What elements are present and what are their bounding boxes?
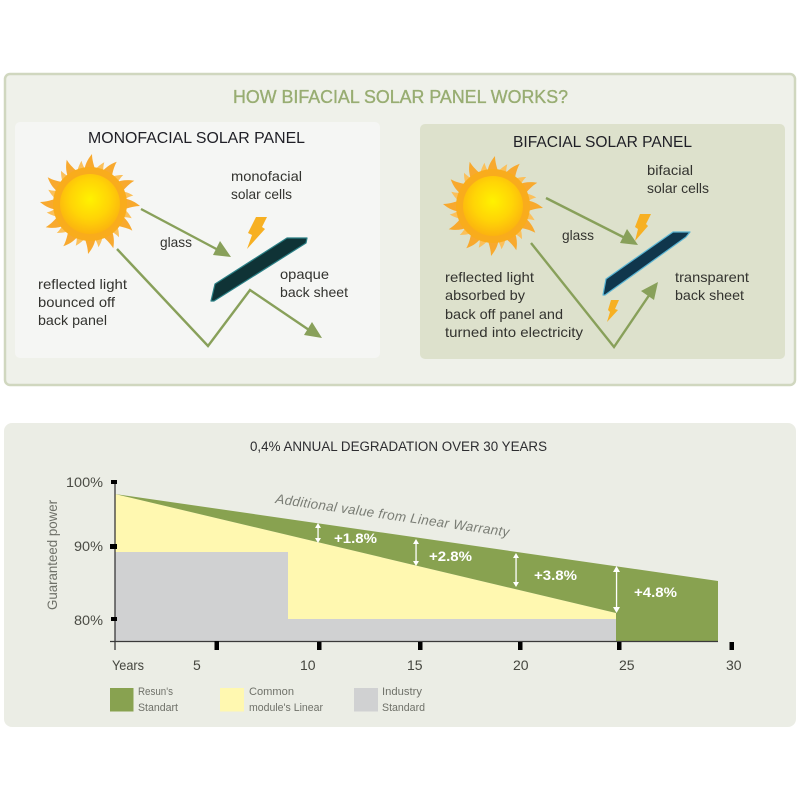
legend: Resun's Standart: Standart	[138, 702, 178, 714]
axes	[110, 482, 718, 650]
x axis labels: 5	[193, 657, 201, 673]
x axis labels: 10	[300, 657, 316, 673]
value: +2.8%: +2.8%	[429, 548, 473, 564]
annotation: additional value: Additional value from Linear Warranty	[274, 491, 512, 540]
icon: sun	[443, 156, 543, 256]
x axis labels: 25	[619, 657, 635, 673]
label: transparent back sheet: back sheet	[675, 287, 744, 303]
legend: Resun's Standart	[110, 686, 178, 714]
arrow: +4.8	[613, 566, 620, 613]
legend: Resun's Standart: Resun's	[138, 686, 173, 698]
x axis labels: 15	[407, 657, 423, 673]
y axis labels: 100%	[66, 474, 103, 490]
icon: lightning bolt bottom	[607, 300, 619, 322]
x axis labels: 20	[513, 657, 529, 673]
arrow: +2.8	[413, 539, 419, 566]
icon: lightning bolt top	[635, 214, 651, 241]
label: transparent back sheet: transparent	[675, 269, 749, 285]
legend: Industry Standard	[354, 686, 425, 714]
label: reflected light	[445, 269, 583, 340]
arrow: reflected light	[117, 249, 322, 346]
value: +4.8%: +4.8%	[634, 584, 678, 600]
label: bifacial solar cells: bifacial	[647, 162, 693, 178]
y axis labels	[66, 474, 103, 628]
label: glass: glass	[562, 227, 594, 243]
legend: Common module's Linear: Common	[249, 686, 294, 698]
panel: bifacial solar panel	[420, 124, 785, 359]
arrow: +3.8	[513, 553, 519, 587]
icon: solar panel	[211, 238, 307, 301]
panel: annual degradation	[4, 423, 796, 727]
value: +3.8%: +3.8%	[534, 567, 578, 583]
legend: Industry Standard: Industry	[382, 686, 422, 698]
heading: degradation: 0,4% ANNUAL DEGRADATION OVER 30 YEARS	[250, 439, 547, 454]
arrow: direct light	[546, 198, 638, 245]
legend: Common module's Linear: module's Linear	[249, 702, 323, 714]
icon: sun	[40, 154, 140, 254]
label: reflected light: reflected light	[445, 269, 534, 285]
arrow: direct light	[141, 209, 231, 257]
legend: Industry Standard: Standard	[382, 702, 425, 714]
icon: lightning bolt	[247, 217, 267, 249]
label: bifacial solar cells: solar cells	[647, 180, 709, 196]
arrow: reflected light	[531, 243, 658, 347]
label: reflected light	[38, 276, 127, 328]
label: monofacial solar cells: solar cells	[231, 186, 292, 202]
panel: monofacial solar panel	[15, 122, 380, 358]
label: opaque back sheet: opaque	[280, 266, 329, 282]
label: reflected light: absorbed by	[445, 287, 525, 303]
area: common module linear	[115, 494, 616, 619]
label: reflected light: back off panel and	[445, 306, 563, 322]
arrow: +1.8	[315, 523, 321, 543]
icon: solar panel	[603, 232, 690, 295]
heading: bifacial: BIFACIAL SOLAR PANEL	[513, 134, 692, 151]
label: monofacial solar cells	[231, 168, 302, 202]
label: reflected light: back panel	[38, 312, 107, 328]
y axis labels: 80%	[74, 612, 103, 628]
legend	[110, 686, 425, 714]
y axis labels: 90%	[74, 538, 103, 554]
title: HOW BIFACIAL SOLAR PANEL WORKS?	[233, 86, 568, 107]
x axis labels	[112, 657, 742, 673]
label: transparent back sheet	[675, 269, 749, 303]
label: reflected light: reflected light	[38, 276, 127, 292]
heading: monofacial: MONOFACIAL SOLAR PANEL	[88, 130, 305, 147]
area chart	[44, 474, 742, 673]
label: bifacial solar cells	[647, 162, 709, 196]
x axis labels: Years	[112, 657, 144, 673]
label: opaque back sheet: back sheet	[280, 284, 348, 300]
label: reflected light: bounced off	[38, 294, 115, 310]
area: industry standard	[115, 552, 616, 641]
label: glass: glass	[160, 234, 192, 250]
label: reflected light: turned into electricity	[445, 324, 583, 340]
label: opaque back sheet	[280, 266, 348, 300]
x axis labels: 30	[726, 657, 742, 673]
panel: how bifacial solar panel works	[5, 74, 795, 385]
legend: Common module's Linear	[220, 686, 323, 714]
area: Resun standard	[115, 494, 718, 641]
y axis title: Guaranteed power	[44, 500, 60, 610]
label: monofacial solar cells: monofacial	[231, 168, 302, 184]
value: +1.8%: +1.8%	[334, 530, 378, 546]
axis ticks	[110, 480, 734, 650]
